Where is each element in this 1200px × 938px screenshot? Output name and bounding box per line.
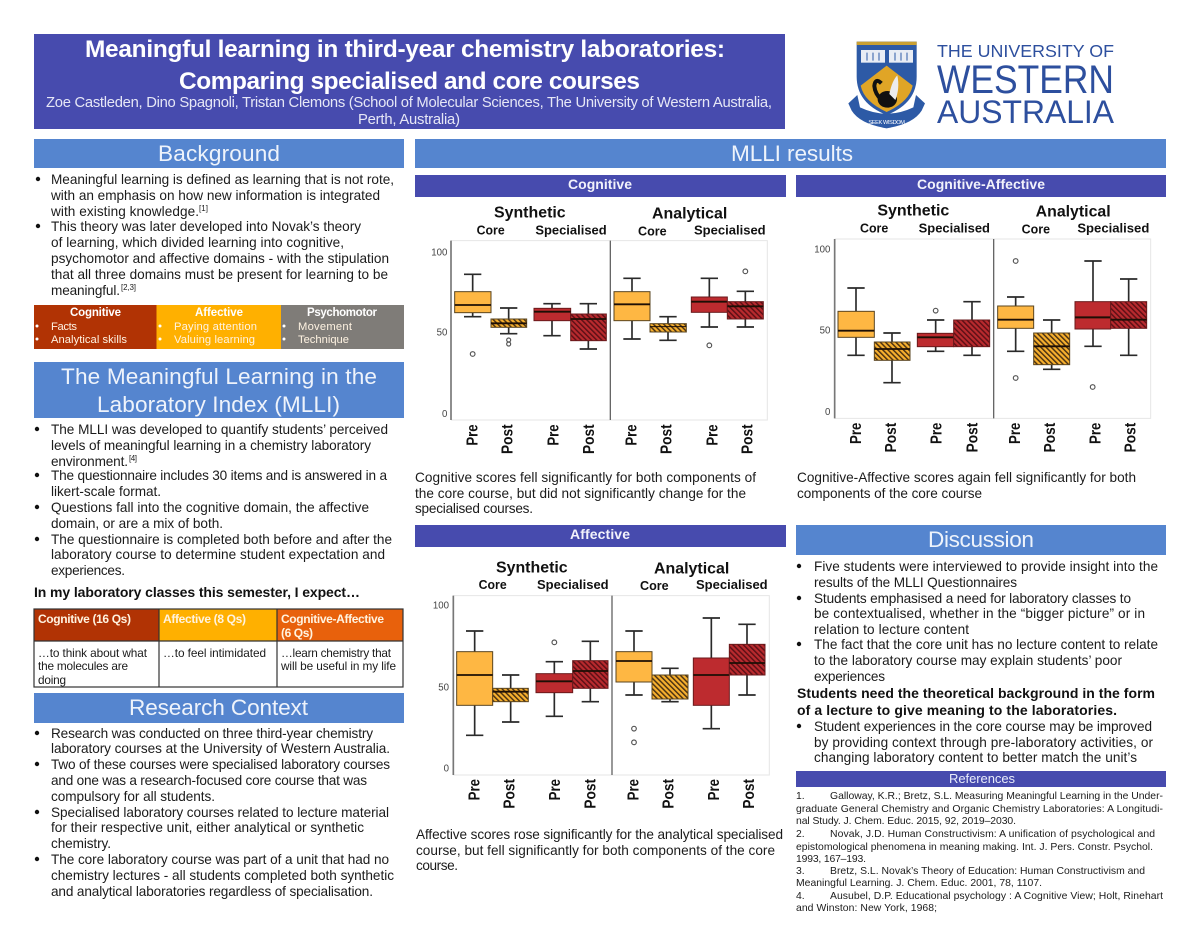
box plot: cognitive <box>431 205 767 454</box>
box plot: affective: Pre <box>625 779 642 800</box>
text: MLLI bullets: laboratory course to determine student expectation and <box>51 547 385 562</box>
box plot: cognitive: Pre <box>704 424 721 446</box>
box plot: cognitive-affective: Post <box>964 423 981 452</box>
box plot: cognitive: 100 <box>431 247 447 258</box>
box plot: cognitive-affective: Pre <box>929 423 946 444</box>
text: research context bullets: chemistry lectures - all students completed both synthetic <box>51 868 394 883</box>
text: MLLI bullets: environment. <box>51 454 128 469</box>
box plot: affective: Post <box>583 779 600 809</box>
text: research context bullets: laboratory courses at the University of Western Australia. <box>51 741 390 756</box>
box plot: cognitive-affective: Post <box>1123 423 1140 452</box>
logo wordmark <box>937 41 1114 130</box>
text: background bullets: with existing knowledge. <box>50 204 199 219</box>
title banner: Meaningful learning in third-year chemistry laboratories: <box>85 36 725 63</box>
domain strip: affective: Valuing learning <box>174 334 255 346</box>
box plot: affective: 100 <box>433 601 449 612</box>
domain strip: affective: Affective <box>195 307 243 319</box>
text: research context bullets <box>35 726 394 899</box>
text: background bullets: of learning, which divided learning into cognitive, <box>51 235 344 250</box>
caption: cognitive-affective: Cognitive-Affective scores again fell significantly for both <box>797 470 1136 485</box>
text: MLLI bullets: domain, or are a mix of both. <box>51 516 223 531</box>
heading: discussion <box>796 525 1166 555</box>
text: reference list: Meaningful Learning. J. Chem. Educ. 2001, 78, 1107. <box>796 878 1042 889</box>
text: discussion bullets: to the laboratory course may explain students’ poor <box>814 653 1122 668</box>
subheading: cognitive: Cognitive <box>568 176 632 192</box>
text: research context bullets: Research was conducted on three third-year chemistry <box>51 726 373 741</box>
domain strip: cognitive: Analytical skills <box>51 334 127 346</box>
box plot: cognitive: Pre <box>624 424 641 446</box>
title banner <box>34 34 785 129</box>
domain strip: affective: Paying attention <box>174 321 257 333</box>
text: reference list: Bretz, S.L. Novak’s Theory of Education: Human Constructivism and <box>830 866 1145 877</box>
heading: MLLI: Laboratory Index (MLLI) <box>97 392 340 417</box>
text: MLLI bullets: Questions fall into the cognitive domain, the affective <box>51 500 369 515</box>
box plot: affective <box>433 559 769 809</box>
box plot: affective: 0 <box>444 764 449 775</box>
domain strip: psychomotor: Psychomotor <box>307 307 378 319</box>
text: background bullets: meaningful. <box>51 283 120 298</box>
heading: background: Background <box>158 141 280 166</box>
caption: cognitive-affective <box>797 470 1136 501</box>
text: discussion bullets: The fact that the core unit has no lecture content to relate <box>814 637 1158 652</box>
table: question domains: Cognitive-Affective <box>281 612 384 626</box>
box plot: affective: Post <box>501 779 518 809</box>
table: question domains <box>34 609 403 687</box>
icon: university crest <box>848 42 925 128</box>
text: discussion bullets: by providing context through pre-laboratory activities, or <box>814 735 1153 750</box>
box plot: cognitive-affective <box>814 203 1151 452</box>
subheading: references <box>796 771 1166 787</box>
table: question domains: …to feel intimidated <box>163 646 266 660</box>
caption: cognitive: specialised courses. <box>415 501 533 516</box>
text: reference list: nal Study. J. Chem. Educ. 2015, 92, 2019–2030. <box>796 816 1016 827</box>
text: background bullets: with an emphasis on how new information is integrated <box>50 188 380 203</box>
box plot: cognitive-affective: Core <box>860 221 888 235</box>
title banner: Comparing specialised and core courses <box>179 68 640 95</box>
text: reference list: graduate General Chemistry and Organic Chemistry Laboratories: A Longitudi- <box>796 804 1163 815</box>
box plot: affective: Analytical <box>654 560 729 577</box>
panel: cognitive results <box>415 175 786 516</box>
table: question domains: …to think about what <box>38 646 148 660</box>
text: reference list: Novak, J.D. Human Constructivism: A unification of psychological and <box>830 829 1155 840</box>
text: reference list: Ausubel, D.P. Educational psychology : A Cognitive View; Holt, Rinehart <box>830 891 1163 902</box>
box plot: cognitive: Core <box>638 224 667 238</box>
subheading: cognitive-affective: Cognitive-Affective <box>917 176 1045 192</box>
text: reference list: and Winston: New York, 1968; <box>796 903 937 914</box>
text: reference list: 2. <box>796 829 805 840</box>
text: background bullets: [2,3] <box>121 283 136 292</box>
domain strip: psychomotor: Movement <box>298 321 353 333</box>
heading: MLLI results <box>415 139 1166 168</box>
box plot: affective: Pre <box>466 779 483 800</box>
caption: cognitive: the core course, but did not significantly change for the <box>415 486 746 501</box>
box plot: cognitive-affective: Post <box>883 423 900 452</box>
text: discussion bullets: be contextualised, whether in the “bigger picture” or in <box>814 606 1145 621</box>
text: research context bullets: The core laboratory course was part of a unit that had no <box>51 852 389 867</box>
text: reference list: 4. <box>796 891 805 902</box>
box plot: cognitive-affective: 100 <box>814 245 830 256</box>
icon: university crest: SEEK WISDOM <box>868 120 905 126</box>
subheading: affective: Affective <box>570 526 630 542</box>
text: research context bullets: Two of these courses were specialised laboratory courses <box>51 757 390 772</box>
subheading: cognitive <box>415 175 786 197</box>
text: reference list: 1993, 167–193. <box>796 854 866 865</box>
text: reference list: Galloway, K.R.; Bretz, S.L. Measuring Meaningful Learning in the Under- <box>830 791 1163 802</box>
heading: MLLI <box>34 362 404 418</box>
table: question domains: …learn chemistry that <box>281 646 392 660</box>
panel: cognitive-affective results <box>796 175 1166 501</box>
box plot: affective: Specialised <box>696 578 768 592</box>
box plot: affective: Specialised <box>537 578 609 592</box>
box plot: cognitive: Post <box>581 424 598 454</box>
caption: affective: course, but fell significantly for both components of the core <box>416 843 775 858</box>
subheading: references: References <box>949 771 1016 786</box>
box plot: cognitive: Specialised <box>694 223 766 237</box>
caption: affective <box>416 827 783 873</box>
box plot: affective: Core <box>640 579 669 593</box>
domain strip: cognitive: Cognitive <box>70 307 121 319</box>
logo: University of Western Australia <box>848 41 1114 130</box>
panel: background <box>34 139 404 349</box>
panel: references <box>796 771 1166 914</box>
text: discussion bullets: changing laboratory content to better match the unit’s <box>814 750 1137 765</box>
text: reference list: epistomological phenomena in meaning making. Int. J. Pers. Constr. Psychol. <box>796 842 1153 853</box>
text: background bullets: This theory was later developed into Novak’s theory <box>51 219 361 234</box>
caption: cognitive: Cognitive scores fell significantly for both components of <box>415 470 756 485</box>
text: background bullets: that all three domains must be present for learning to be <box>51 267 388 282</box>
box plot: cognitive-affective: Specialised <box>919 221 990 235</box>
table: question domains: (6 Qs) <box>281 626 313 640</box>
box plot: cognitive-affective: Pre <box>1088 423 1105 444</box>
caption: cognitive-affective: components of the core course <box>797 486 982 501</box>
text: discussion bullets: results of the MLLI Questionnaires <box>814 575 1017 590</box>
logo wordmark: WESTERN <box>937 58 1114 102</box>
text: reference list <box>796 791 1163 914</box>
box plot: cognitive-affective: Post <box>1042 423 1059 452</box>
domain strip: cognitive: Facts <box>51 321 77 333</box>
box plot: affective: Pre <box>706 779 723 800</box>
text: discussion bullets: Students emphasised a need for laboratory classes to <box>814 591 1131 606</box>
box plot: affective: Post <box>741 779 758 809</box>
text: MLLI bullets: likert-scale format. <box>51 484 161 499</box>
text: MLLI bullets: experiences. <box>51 563 125 578</box>
text: research context bullets: and analytical laboratories regardless of specialisation. <box>51 884 373 899</box>
heading: MLLI: The Meaningful Learning in the <box>61 364 377 389</box>
domain strip: psychomotor: Technique <box>298 334 349 346</box>
logo wordmark: THE UNIVERSITY OF <box>937 41 1114 61</box>
box plot: cognitive-affective: Pre <box>1007 423 1024 444</box>
table: question domains: Affective (8 Qs) <box>163 612 246 626</box>
box plot: cognitive: 0 <box>442 409 447 420</box>
title banner: Perth, Australia) <box>358 112 460 128</box>
box plot: cognitive: Post <box>739 424 756 454</box>
text: background bullets <box>36 172 394 298</box>
box plot: cognitive-affective: Core <box>1022 222 1050 236</box>
text: research context bullets: and one was a research-focused core course that was <box>51 773 367 788</box>
box plot: cognitive-affective: 0 <box>825 407 830 418</box>
domain strip: cognitive <box>34 305 156 349</box>
box plot: cognitive-affective: Analytical <box>1036 204 1111 221</box>
table: question domains: doing <box>38 673 66 687</box>
box plot: affective: Synthetic <box>496 559 568 576</box>
panel: research context <box>34 693 404 899</box>
box plot: cognitive: Core <box>477 223 505 237</box>
text: background bullets: psychomotor and affective domains - with the stipulation <box>51 251 389 266</box>
text: discussion bullets: Student experiences in the core course may be improved <box>814 719 1152 734</box>
text: MLLI bullets: [4] <box>129 454 137 463</box>
panel: the MLLI <box>34 362 404 687</box>
panel: affective results <box>415 525 786 873</box>
text: research context bullets: compulsory for all students. <box>51 789 215 804</box>
box plot: affective: Core <box>479 578 507 592</box>
panel: discussion <box>796 525 1166 765</box>
box plot: cognitive: Post <box>659 424 676 454</box>
text: reference list: 1. <box>796 791 805 802</box>
subheading: affective <box>415 525 786 547</box>
heading: research context <box>34 693 404 723</box>
box plot: affective: 50 <box>438 682 449 693</box>
box plot: cognitive: Pre <box>465 424 482 446</box>
caption: affective: course. <box>416 858 458 873</box>
text: survey prompt: In my laboratory classes this semester, I expect… <box>34 584 360 600</box>
box plot: cognitive: Synthetic <box>494 205 566 222</box>
text: research context bullets: chemistry. <box>51 836 111 851</box>
text: discussion bullets: Students need the theoretical background in the form <box>797 685 1155 701</box>
text: discussion bullets: relation to lecture content <box>814 622 969 637</box>
text: MLLI bullets: levels of meaningful learning in a chemistry laboratory <box>51 438 371 453</box>
box plot: cognitive: Specialised <box>535 223 607 237</box>
text: discussion bullets: experiences <box>814 669 885 684</box>
box plot: cognitive-affective: Pre <box>848 423 865 444</box>
text: MLLI bullets: The questionnaire includes 30 items and is answered in a <box>51 468 387 483</box>
text: background bullets: [1] <box>199 204 208 213</box>
box plot: cognitive: Post <box>500 424 517 454</box>
table: question domains: the molecules are <box>38 659 128 673</box>
caption: affective: Affective scores rose significantly for the analytical specialised <box>416 827 783 842</box>
text: MLLI bullets: The MLLI was developed to quantify students’ perceived <box>51 422 388 437</box>
caption: cognitive <box>415 470 756 516</box>
text: MLLI bullets <box>35 422 392 578</box>
text: discussion bullets: of a lecture to give meaning to the laboratories. <box>797 702 1117 718</box>
text: MLLI bullets: The questionnaire is completed both before and after the <box>51 532 392 547</box>
heading: research context: Research Context <box>129 695 309 720</box>
text: discussion bullets: Five students were interviewed to provide insight into the <box>814 559 1158 574</box>
text: research context bullets: for their respective unit, either analytical or synthetic <box>51 820 364 835</box>
box plot: cognitive-affective: Specialised <box>1077 221 1149 235</box>
heading: discussion: Discussion <box>928 527 1034 552</box>
logo wordmark: AUSTRALIA <box>937 94 1114 130</box>
domain strip: affective <box>156 305 281 349</box>
box plot: affective: Pre <box>547 779 564 800</box>
text: background bullets: Meaningful learning is defined as learning that is not rote, <box>51 172 394 187</box>
box plot: cognitive: Analytical <box>652 206 727 223</box>
heading: background <box>34 139 404 168</box>
text: discussion bullets <box>797 559 1158 765</box>
heading: MLLI results: MLLI results <box>731 141 853 166</box>
table: question domains: will be useful in my life <box>280 659 396 673</box>
table: question domains: Cognitive (16 Qs) <box>38 612 131 626</box>
text: research context bullets: Specialised laboratory courses related to lecture material <box>51 805 389 820</box>
box plot: cognitive-affective: Synthetic <box>877 203 949 220</box>
domain strip: psychomotor <box>281 305 404 349</box>
box plot: cognitive: 50 <box>437 327 447 338</box>
box plot: cognitive: Pre <box>545 424 562 446</box>
subheading: cognitive-affective <box>796 175 1166 197</box>
title banner: Zoe Castleden, Dino Spagnoli, Tristan Clemons (School of Molecular Sciences, The University of Western Australia, <box>46 95 772 111</box>
box plot: affective: Post <box>660 779 677 809</box>
box plot: cognitive-affective: 50 <box>820 326 830 337</box>
text: reference list: 3. <box>796 866 805 877</box>
